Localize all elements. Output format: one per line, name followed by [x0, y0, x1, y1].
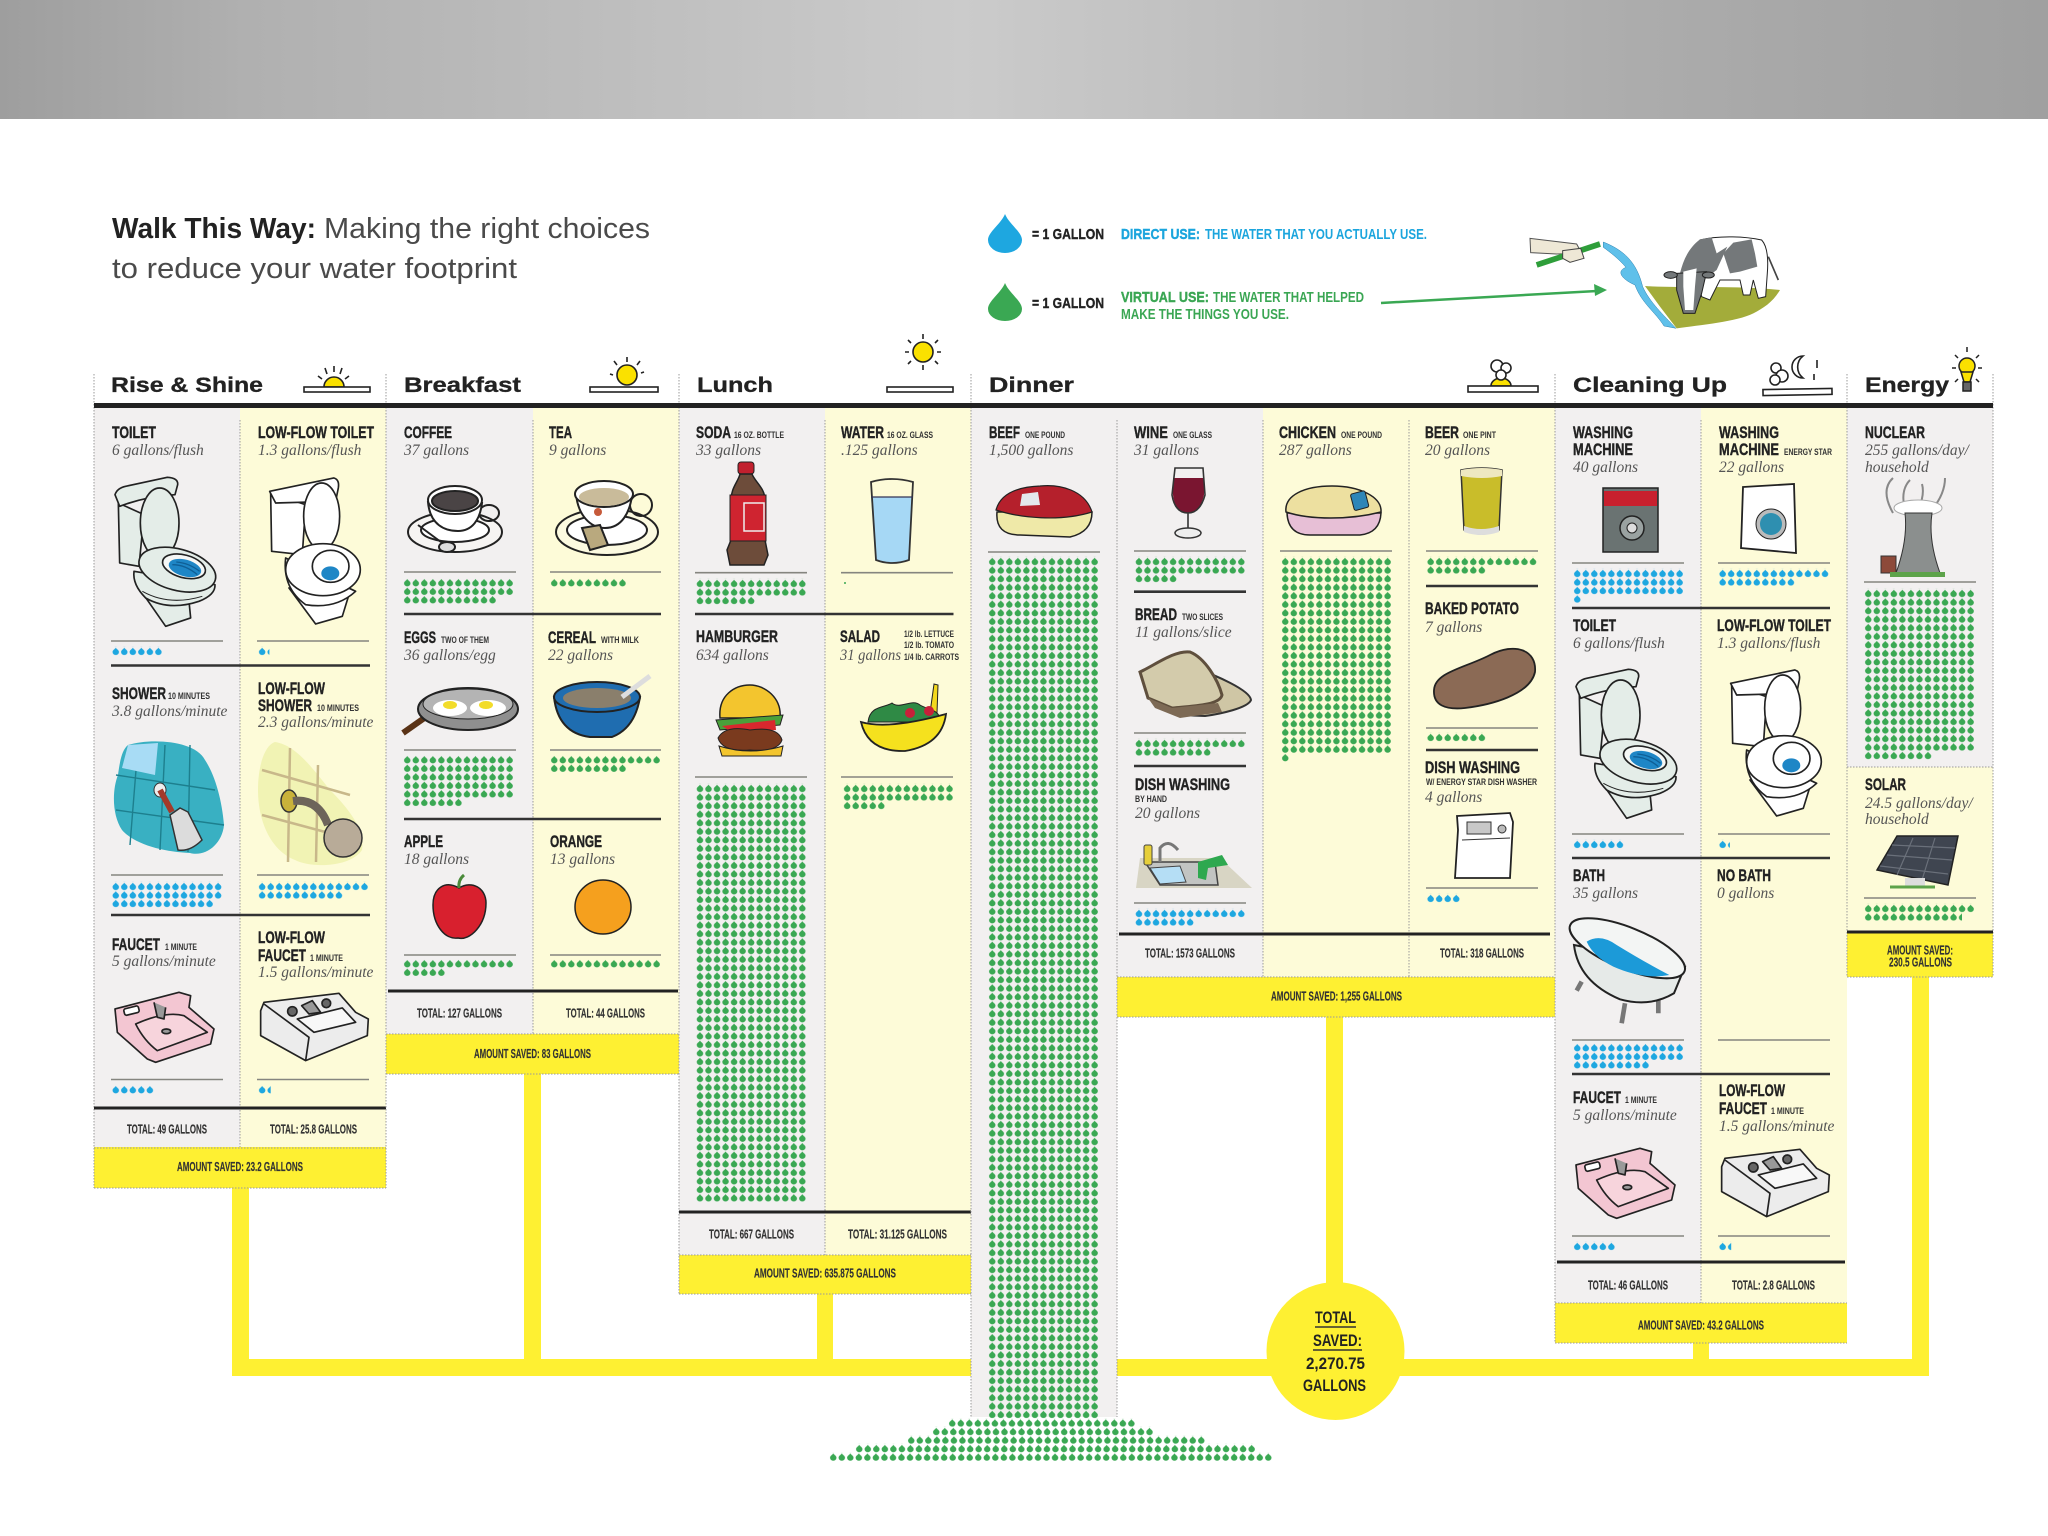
totals: Rise & Shine: TOTAL: 49 GALLONS [127, 1122, 207, 1136]
legend: virtual use: = 1 GALLON [1032, 295, 1104, 312]
item: nuclear: NUCLEAR [1865, 423, 1925, 442]
item: low-flow faucet: 1 MINUTE [310, 953, 343, 964]
item: eggs [403, 628, 518, 806]
item: solar: SOLAR [1865, 775, 1906, 794]
top grey band [0, 0, 2048, 119]
panel: Dinner [829, 360, 1555, 1461]
item: washing machine: MACHINE [1573, 440, 1633, 459]
item: no bath: NO BATH [1717, 866, 1771, 885]
item: low-flow toilet [257, 423, 374, 655]
item: low-flow faucet: 1.5 gallons/minute [1719, 1118, 1835, 1135]
item: beef [988, 423, 1100, 1418]
item: low-flow shower: 10 MINUTES [317, 703, 359, 714]
item: wine: 31 gallons [1133, 442, 1199, 459]
icon: midday sun [887, 334, 953, 392]
item: faucet: FAUCET [1573, 1088, 1621, 1107]
icon: moon and cloud [1763, 356, 1832, 396]
item: no bath: 0 gallons [1717, 885, 1774, 902]
item: soda: 16 OZ. BOTTLE [734, 430, 784, 441]
item: no bath [1717, 866, 1830, 1040]
salad ingredients [904, 629, 959, 663]
item: soda [695, 423, 807, 604]
header: Rise & Shine: Rise & Shine [111, 374, 263, 397]
salad ingredients: 1/2 lb. LETTUCE [904, 629, 954, 640]
item: low-flow faucet [1718, 1081, 1835, 1250]
total saved circle: TOTAL [1315, 1308, 1356, 1327]
item: bath [1562, 866, 1692, 1069]
item: washing machine: WASHING [1573, 423, 1633, 442]
header: Breakfast: Breakfast [404, 374, 521, 397]
amount saved: Cleaning Up: AMOUNT SAVED: 43.2 GALLONS [1638, 1318, 1764, 1332]
item: nuclear: household [1865, 459, 1929, 476]
item: dish washing by hand: DISH WASHING [1135, 775, 1230, 794]
item: solar [1864, 775, 1976, 921]
totals: Cleaning Up: TOTAL: 2.8 GALLONS [1732, 1278, 1815, 1292]
item: cereal [548, 628, 661, 772]
item: orange: 13 gallons [550, 851, 615, 868]
legend: direct use: THE WATER THAT YOU ACTUALLY USE. [1205, 226, 1427, 243]
totals: Cleaning Up: TOTAL: 46 GALLONS [1588, 1278, 1668, 1292]
item: tea: TEA [549, 423, 572, 442]
totals: Lunch: TOTAL: 31.125 GALLONS [848, 1228, 947, 1242]
panel: Breakfast [386, 357, 679, 1188]
item: shower [111, 684, 228, 907]
total saved circle [1266, 1282, 1404, 1420]
item: faucet: 5 gallons/minute [112, 953, 216, 970]
totals: Dinner [1145, 946, 1524, 960]
item: dish washing energy star: 4 gallons [1425, 789, 1482, 806]
totals: Rise & Shine: TOTAL: 25.8 GALLONS [270, 1122, 357, 1136]
item: beef: 1,500 gallons [989, 442, 1073, 459]
totals: Breakfast: TOTAL: 127 GALLONS [417, 1006, 502, 1020]
illustration: hose watering a cow [1530, 237, 1780, 328]
item: low-flow faucet: 1.5 gallons/minute [258, 964, 374, 981]
panel: Cleaning Up [1555, 356, 1847, 1343]
item: hamburger [695, 627, 807, 1202]
item: low-flow toilet: LOW-FLOW TOILET [1717, 616, 1831, 635]
item: baked potato: 7 gallons [1425, 619, 1482, 636]
item: wine: WINE [1134, 423, 1168, 442]
arrow: virtual use to cow [1381, 284, 1607, 303]
item: dish washing by hand: 20 gallons [1135, 805, 1200, 822]
item: low-flow faucet: FAUCET [1719, 1099, 1767, 1118]
item: coffee: 37 gallons [403, 442, 469, 459]
legend: direct use: = 1 GALLON [1032, 226, 1104, 243]
title: to reduce your water footprint [112, 253, 517, 285]
item: dish washing by hand [1134, 775, 1252, 926]
item: low-flow shower: 2.3 gallons/minute [258, 714, 374, 731]
total saved circle: SAVED: [1313, 1331, 1362, 1350]
item: coffee [403, 423, 516, 604]
amount saved: Dinner: AMOUNT SAVED: 1,255 GALLONS [1271, 990, 1402, 1004]
item: toilet: 6 gallons/flush [1573, 635, 1665, 652]
item: solar: household [1865, 811, 1929, 828]
legend: virtual use [988, 283, 1364, 323]
item: chicken [1279, 423, 1392, 761]
amount saved: Energy: AMOUNT SAVED: [1887, 944, 1953, 958]
item: apple: APPLE [404, 832, 443, 851]
item: toilet: TOILET [1573, 616, 1616, 635]
item: dish washing energy star: DISH WASHING [1425, 758, 1520, 777]
item: beer: 20 gallons [1425, 442, 1490, 459]
item: bread [1134, 605, 1251, 756]
dripping drops pyramid [829, 1418, 1273, 1461]
item: washing machine energy star: ENERGY STAR [1784, 447, 1832, 458]
item: dish washing energy star [1425, 758, 1538, 902]
item: washing machine [1572, 423, 1684, 603]
item: washing machine energy star: WASHING [1719, 423, 1779, 442]
total saved circle: GALLONS [1303, 1376, 1366, 1395]
item: bread: 11 gallons/slice [1135, 624, 1232, 641]
item: washing machine energy star [1718, 423, 1832, 586]
item: apple [403, 832, 516, 976]
total saved circle: 2,270.75 [1306, 1354, 1365, 1373]
icon: morning sun [590, 357, 658, 392]
item: faucet: 1 MINUTE [165, 942, 197, 953]
item: hamburger: HAMBURGER [696, 627, 778, 646]
item: bread: TWO SLICES [1182, 612, 1223, 623]
item: salad: SALAD [840, 627, 880, 646]
item: soda: 33 gallons [695, 442, 761, 459]
item: baked potato [1425, 599, 1538, 741]
header: Lunch: Lunch [697, 374, 773, 397]
item: chicken: ONE POUND [1341, 430, 1382, 441]
item: cereal: 22 gallons [548, 647, 613, 664]
legend: direct use [988, 214, 1427, 253]
item: beef: BEEF [989, 423, 1020, 442]
item: toilet: TOILET [112, 423, 156, 442]
amount saved: Breakfast: AMOUNT SAVED: 83 GALLONS [474, 1047, 591, 1061]
totals: Dinner: TOTAL: 1573 GALLONS [1145, 946, 1235, 960]
title: Making the right choices [324, 213, 650, 245]
item: water [841, 423, 953, 584]
item: water: .125 gallons [841, 442, 918, 459]
item: faucet: FAUCET [112, 935, 160, 954]
item: low-flow toilet: 1.3 gallons/flush [1717, 635, 1821, 652]
item: nuclear [1864, 423, 1976, 759]
item: washing machine energy star: 22 gallons [1719, 459, 1784, 476]
item: shower: 3.8 gallons/minute [111, 703, 228, 720]
item: toilet [111, 423, 223, 655]
title [112, 213, 650, 285]
item: cereal: CEREAL [548, 628, 596, 647]
item: beer: BEER [1425, 423, 1459, 442]
item: tea: 9 gallons [549, 442, 606, 459]
item: baked potato: BAKED POTATO [1425, 599, 1519, 618]
item: hamburger: 634 gallons [696, 647, 769, 664]
item: tea [549, 423, 661, 587]
item: low-flow faucet: 1 MINUTE [1771, 1106, 1804, 1117]
totals: Breakfast: TOTAL: 44 GALLONS [566, 1006, 645, 1020]
item: low-flow faucet: LOW-FLOW [1719, 1081, 1786, 1100]
item: apple: 18 gallons [404, 851, 469, 868]
item: low-flow toilet [1717, 616, 1831, 848]
item: bath: 35 gallons [1572, 885, 1638, 902]
item: water: WATER [841, 423, 884, 442]
amount saved: Energy [1887, 944, 1953, 970]
item: low-flow faucet: LOW-FLOW [258, 928, 326, 947]
icon: setting sun with cloud [1468, 360, 1538, 392]
item: beer: ONE PINT [1463, 430, 1496, 441]
item: low-flow toilet: 1.3 gallons/flush [258, 442, 362, 459]
item: eggs: 36 gallons/egg [403, 647, 496, 664]
item: bath: BATH [1573, 866, 1605, 885]
header: Dinner: Dinner [989, 374, 1074, 397]
connector: yellow pipes to total [232, 970, 1929, 1376]
item: nuclear: 255 gallons/day/ [1865, 442, 1970, 459]
item: faucet: 1 MINUTE [1625, 1095, 1657, 1106]
legend: direct use: DIRECT USE: [1121, 226, 1200, 243]
totals: Lunch: TOTAL: 667 GALLONS [709, 1228, 794, 1242]
panel: Rise & Shine [94, 366, 386, 1188]
item: shower: 10 MINUTES [168, 691, 210, 702]
item: low-flow faucet [257, 928, 374, 1094]
item: coffee: COFFEE [404, 423, 452, 442]
legend: virtual use: MAKE THE THINGS YOU USE. [1121, 306, 1289, 323]
item: salad [839, 627, 959, 809]
totals: Breakfast [417, 1006, 645, 1020]
amount saved: Rise & Shine: AMOUNT SAVED: 23.2 GALLONS [177, 1160, 303, 1174]
totals: Cleaning Up [1588, 1278, 1815, 1292]
item: chicken: 287 gallons [1279, 442, 1352, 459]
legend: virtual use: VIRTUAL USE: [1121, 289, 1209, 306]
totals: Dinner: TOTAL: 318 GALLONS [1440, 946, 1524, 960]
header: Cleaning Up: Cleaning Up [1573, 374, 1727, 397]
item: toilet [1572, 616, 1684, 848]
panel: Energy [1847, 347, 1993, 977]
item: faucet [111, 935, 223, 1094]
item: eggs: EGGS [404, 628, 436, 647]
totals: Rise & Shine [127, 1122, 357, 1136]
header divider rule [94, 403, 1993, 408]
salad ingredients: 1/2 lb. TOMATO [904, 640, 954, 651]
item: low-flow shower: SHOWER [258, 696, 312, 715]
item: orange [550, 832, 661, 968]
totals: Lunch [709, 1228, 947, 1242]
item: low-flow faucet: FAUCET [258, 946, 306, 965]
item: cereal: WITH MILK [601, 635, 639, 646]
item: bread: BREAD [1135, 605, 1177, 624]
item: washing machine energy star: MACHINE [1719, 440, 1779, 459]
item: solar: 24.5 gallons/day/ [1865, 795, 1974, 812]
item: low-flow shower: LOW-FLOW [258, 679, 326, 698]
item: soda: SODA [696, 423, 731, 442]
item: water: 16 OZ. GLASS [887, 430, 933, 441]
salad ingredients: 1/4 lb. CARROTS [904, 652, 959, 663]
icon: light bulb [1952, 347, 1982, 391]
legend: virtual use: THE WATER THAT HELPED [1213, 289, 1364, 306]
panel: Lunch [679, 334, 971, 1294]
item: faucet [1572, 1088, 1684, 1250]
item: dish washing energy star: W/ ENERGY STAR DISH WASHER [1426, 777, 1537, 788]
item: orange: ORANGE [550, 832, 602, 851]
item: washing machine: 40 gallons [1573, 459, 1638, 476]
item: chicken: CHICKEN [1279, 423, 1336, 442]
header: Energy: Energy [1865, 374, 1949, 397]
item: salad: 31 gallons [839, 647, 901, 664]
amount saved: Lunch: AMOUNT SAVED: 635.875 GALLONS [754, 1266, 896, 1280]
icon: rising sun [304, 366, 370, 392]
amount saved: Energy: 230.5 GALLONS [1889, 956, 1952, 970]
item: beer [1425, 423, 1538, 574]
item: eggs: TWO OF THEM [441, 635, 489, 646]
title: Walk This Way: [112, 213, 316, 245]
item: wine [1133, 423, 1246, 582]
item: dish washing by hand: BY HAND [1135, 794, 1167, 805]
item: wine: ONE GLASS [1173, 430, 1212, 441]
item: faucet: 5 gallons/minute [1573, 1107, 1677, 1124]
item: low-flow toilet: LOW-FLOW TOILET [258, 423, 374, 442]
item: low-flow shower [257, 679, 374, 899]
item: beef: ONE POUND [1025, 430, 1065, 441]
item: toilet: 6 gallons/flush [112, 442, 204, 459]
item: shower: SHOWER [112, 684, 166, 703]
